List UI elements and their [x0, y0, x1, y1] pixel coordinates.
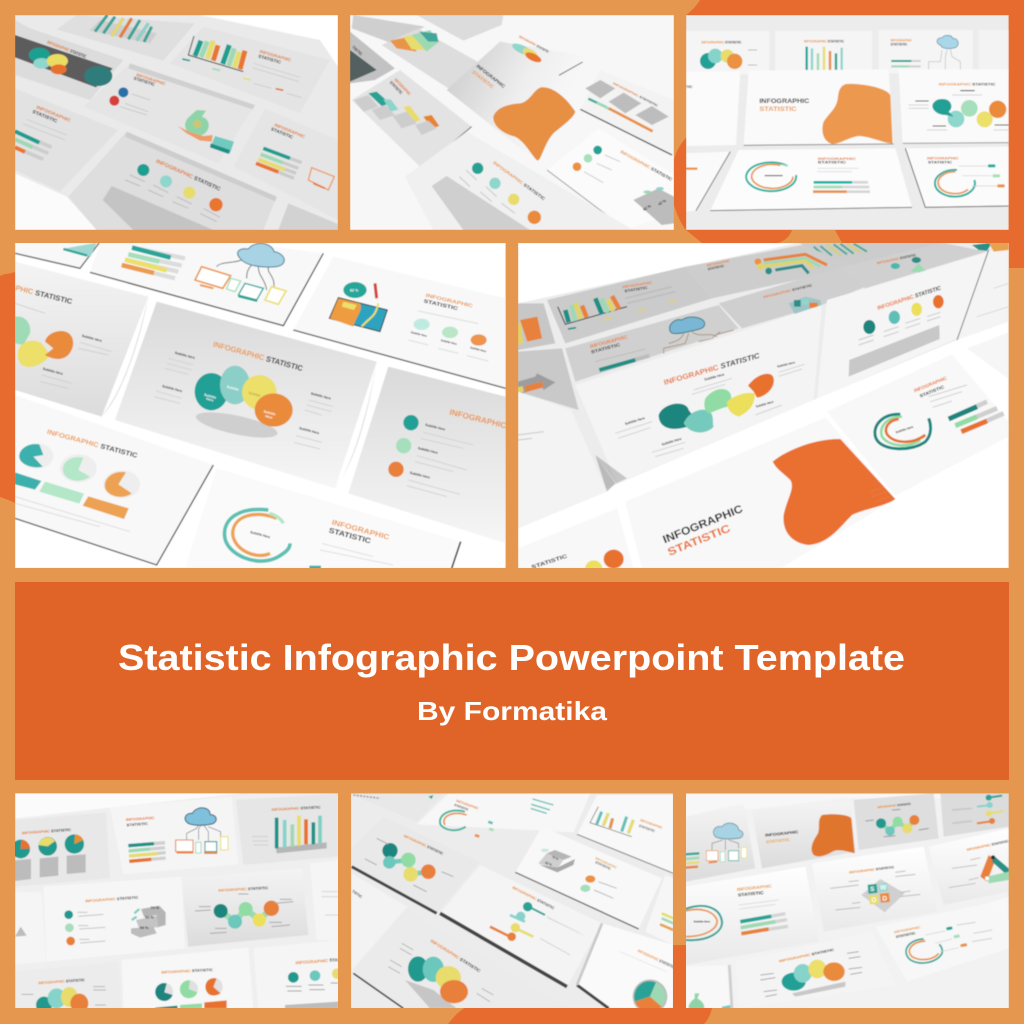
slide: far right wall	[957, 243, 1009, 340]
panel: photo 5 perspective slides with wave and title blob	[517, 243, 1009, 578]
slide: back row cloud: INFOGRAPHIC	[891, 39, 913, 43]
slide: wall with circles row	[817, 252, 989, 398]
slide: bubbles partial	[15, 962, 122, 1013]
slide: centre bubble cluster: Subtitle	[248, 391, 261, 398]
slide: back left arrow	[517, 348, 579, 410]
slide: bubbles partial: INFOGRAPHIC STATISTIC	[38, 978, 85, 985]
slide: three pies: INFOGRAPHIC STATISTIC	[22, 828, 72, 835]
slide: pies with labels	[122, 948, 253, 1008]
panel: photo 8 slides with SWOT and ring	[685, 793, 1010, 1009]
slide: stair labels: INFOGRAPHIC	[393, 77, 412, 96]
slide: four circles with text panel	[68, 132, 277, 230]
slide: wall with circles row: INFOGRAPHIC STATISTIC	[877, 285, 943, 312]
slide: SWOT: INFOGRAPHIC STATISTIC	[849, 865, 895, 875]
chart: ring	[875, 414, 931, 449]
slide: top left	[352, 15, 425, 43]
icon: stairs: 70 %	[551, 855, 559, 861]
slide: bottom right ring: STATISTIC	[928, 160, 953, 164]
slide: bubbles bottom	[735, 932, 895, 1009]
decorative blob: top right	[674, 0, 1024, 268]
slide: ring and bars: STATISTIC	[919, 384, 945, 399]
slide: ring and bars: INFOGRAPHIC	[913, 375, 948, 393]
slide: back angled arrows: STATISTIC	[707, 264, 725, 271]
slide: circles partial: INFOGRAPHIC	[295, 958, 328, 965]
slide: circles partial	[253, 940, 351, 1008]
slide: cloud with bars: INFOGRAPHIC	[126, 816, 155, 822]
slide: far right corner	[967, 332, 1009, 379]
slide: three circles with grey arrows: 42 %	[658, 198, 667, 206]
slide: SWOT: W	[880, 885, 887, 892]
slide: bubbles angled: INFOGRAPHIC STATISTIC	[429, 938, 482, 973]
decorative blob: bottom centre	[448, 945, 712, 1024]
slide: back row far right	[1008, 30, 1009, 72]
slide: money bag corner	[685, 965, 732, 1009]
banner: orange title block	[15, 582, 1009, 780]
slide: left wavy circles: Subtitle Here	[42, 367, 63, 376]
slide: bottom centre ring	[710, 148, 912, 211]
slide: back angled arrows	[685, 245, 859, 298]
slide: brush and tablet: Subtitle Here	[470, 345, 487, 353]
slide: bottom left circles: STATISTIC	[531, 554, 568, 571]
slide: stairs: INFOGRAPHIC	[595, 856, 618, 870]
slide: centre bubble cluster: Subtitle Here	[174, 351, 195, 360]
slide: big title with orange blob	[447, 35, 589, 162]
panel: photo 3 front view slides	[686, 15, 1009, 230]
slide: column chart	[236, 793, 338, 865]
slide: right devices	[254, 122, 336, 192]
slide: ring with bars: STATISTIC	[738, 890, 764, 898]
slide: front wave: Subtitle Here	[755, 400, 774, 409]
slide: right icon list	[348, 367, 508, 543]
slide: wavy circles	[899, 69, 1009, 143]
slide: title with orange blob: INFOGRAPHIC	[661, 503, 745, 546]
slide: back row cloud	[879, 30, 973, 73]
slide: back centre diagram: INFOGRAPHIC STATISTIC	[763, 283, 813, 299]
slide: orange blob title: STATISTIC	[766, 837, 790, 844]
slide: bottom left circles	[518, 508, 634, 578]
slide: title with orange blob	[625, 418, 895, 568]
slide: triangle arrows	[929, 828, 1010, 905]
slide: ring: INFOGRAPHIC	[456, 799, 479, 811]
slide: stair labels: STATISTIC	[389, 80, 404, 95]
slide: back angled arrows: INFOGRAPHIC	[706, 259, 731, 268]
panel: photo 6 flat slide wall	[11, 793, 351, 1013]
slide: wave angled	[352, 817, 480, 913]
slide: front wave: INFOGRAPHIC STATISTIC	[663, 351, 761, 387]
slide: corner	[987, 897, 1009, 923]
icon: paint tablet: 62 %	[350, 288, 359, 292]
slide: corner	[278, 203, 338, 230]
slide: left blank	[351, 873, 407, 970]
icon: cloud	[238, 243, 284, 267]
slide: back row circles: INFOGRAPHIC STATISTIC	[701, 41, 742, 45]
slide: bottom centre ring: STATISTIC	[818, 161, 847, 165]
slide: pie: INFOGRAPHIC STATISTIC	[637, 948, 675, 970]
slide: three pies	[11, 812, 110, 887]
slide: centre bubble cluster: Subtitle Here	[310, 391, 331, 401]
slide: top left remainder	[15, 243, 99, 268]
slide: money bag: INFOGRAPHIC	[136, 72, 166, 86]
slide: left wavy circles: PHIC STATISTIC	[15, 283, 74, 306]
slide: centre bubble cluster: Here	[206, 397, 214, 403]
slide: keys: INFOGRAPHIC STATISTIC	[512, 886, 555, 911]
icon: stairs: 54 %	[140, 926, 149, 930]
slide: centre bubble cluster: Subtitle Here	[162, 384, 183, 393]
shape: orange blob	[773, 439, 895, 545]
slide: right devices: INFOGRAPHIC	[274, 122, 306, 139]
slide: clustered bar chart	[181, 36, 302, 98]
slide: partial left	[15, 892, 46, 964]
chart: ring	[746, 162, 796, 191]
slide: bottom four circles	[420, 134, 630, 230]
slide: circles partial: STATISTIC	[329, 958, 351, 963]
slide: dark ribbon edge: TISTIC	[351, 44, 364, 57]
panel: photo 7 angled slides	[351, 793, 675, 1014]
slide: title with orange blob: STATISTIC	[759, 106, 797, 113]
slide: title with orange blob: STATISTIC	[666, 523, 732, 559]
icon: cloud	[185, 808, 216, 825]
slide: cloud and devices	[90, 243, 323, 326]
slide: left wall	[518, 392, 615, 528]
slide: top strip	[352, 793, 443, 822]
slide: ring right	[875, 903, 1009, 982]
chart: ring	[225, 509, 290, 561]
slide: stairs	[43, 877, 185, 962]
slide: big title with orange blob: INFOGRAPHIC STATISTIC	[518, 35, 550, 54]
slide: bottom ring	[185, 468, 461, 569]
icon: money bag in hand	[178, 110, 234, 154]
slide: stairs	[515, 827, 662, 929]
slide: ring right: INFOGRAPHIC	[894, 925, 921, 934]
slide: brush and tablet: Subtitle Here	[440, 338, 458, 346]
slide: bottom ring: Subtitle Here	[250, 530, 271, 539]
slide: wave highlighted	[182, 868, 308, 947]
slide: map ribbons	[382, 28, 483, 88]
slide: bar chart: INFOGRAPHIC	[622, 281, 653, 289]
slide: ring with bars: Subtitle Here	[694, 920, 711, 924]
subtitle: By Formatika	[417, 696, 608, 726]
slide: bottom right ring: INFOGRAPHIC	[927, 156, 959, 160]
slide: wave small: INFOGRAPHIC STATISTIC	[877, 802, 912, 809]
slide: centre bubble cluster: Subtitle	[204, 393, 217, 400]
slide: ring with bars	[685, 867, 819, 965]
slide: bottom ring: STATISTIC	[328, 526, 373, 546]
slide: SWOT: D	[882, 895, 887, 902]
slide: money bag	[108, 64, 255, 154]
slide: cloud diagram: INFOGRAPHIC	[589, 334, 629, 350]
slide: top middle	[417, 15, 503, 41]
slide: big title with orange blob: INFOGRAPHIC	[475, 64, 507, 89]
slide: ring and bars: Subtitle Here	[895, 425, 914, 434]
slide: centre bubble cluster	[115, 302, 377, 488]
slide: back row bars	[776, 32, 871, 70]
slide: front wave	[575, 305, 822, 483]
slide: keys	[440, 865, 602, 987]
slide: partial right	[310, 860, 338, 940]
slide: back left orange card	[518, 303, 555, 350]
slide: keys small	[940, 793, 1009, 837]
slide: wavy circles: INFOGRAPHIC STATISTIC	[939, 81, 995, 86]
slide: ring with bars: INFOGRAPHIC	[737, 883, 772, 892]
slide: bottom left pie charts: INFOGRAPHIC STATISTIC	[46, 429, 138, 460]
slide: SWOT: O	[871, 897, 877, 904]
slide: ring and bars	[827, 354, 1009, 496]
slide: pies with labels: INFOGRAPHIC STATISTIC	[161, 968, 213, 975]
slide: right icon list: Subtitle Here	[425, 423, 446, 432]
icon: stairs	[538, 849, 575, 872]
slide: centre bubble cluster: INFOGRAPHIC STATISTIC	[212, 340, 304, 373]
slide: three circles with grey arrows: 62 %	[642, 204, 652, 212]
slide: bubbles angled	[353, 908, 569, 1008]
slide: left progress bars: STATISTIC	[32, 109, 59, 124]
panel: photo 1 slides with bars and money bag	[15, 15, 338, 230]
slide: brush and tablet: INFOGRAPHIC	[425, 293, 474, 310]
slide: stairs: INFOGRAPHIC STATISTIC	[85, 896, 139, 903]
slide: four circles with text panel: INFOGRAPHIC STATISTIC	[155, 159, 221, 193]
slide: centre bubble cluster: Subtitle Here	[299, 426, 320, 435]
slide: back row circles	[686, 31, 769, 74]
slide: bottom left pie charts	[15, 395, 213, 565]
slide: grey cards with long bar: INFOGRAPHIC STATISTIC	[612, 81, 660, 108]
slide: stairs: STATISTIC	[595, 860, 612, 871]
slide: top bar chart	[57, 15, 195, 61]
slide: back right circles: INFOGRAPHIC STATISTIC	[876, 253, 917, 265]
slide: bars	[577, 795, 673, 873]
slide: front wave: Subtitle Here	[704, 372, 725, 382]
slide: wave angled: INFOGRAPHIC STATISTIC	[403, 834, 444, 856]
slide: triangle arrows: INFOGRAPHIC STATISTIC	[966, 839, 1010, 852]
slide: SWOT: S	[870, 886, 875, 893]
slide: ring: STATISTIC	[454, 803, 470, 812]
slide: back centre diagram	[719, 268, 865, 328]
slide: wave small	[854, 793, 939, 850]
panel: photo 2 slides with orange title blob	[350, 15, 674, 230]
slide: bottom four circles: INFOGRAPHIC STATISTIC	[492, 160, 546, 201]
slide: cloud with bars: STATISTIC	[126, 822, 148, 827]
slide: ring	[417, 793, 590, 838]
slide: grey cards with long bar	[580, 80, 673, 156]
slide: front wave: Subtitle Here	[624, 416, 645, 426]
slide: dark ribbon edge	[350, 32, 395, 83]
slide: ring right: STATISTIC	[895, 931, 917, 939]
slide: bottom centre ring: INFOGRAPHIC	[818, 157, 857, 161]
slide: money bag: STATISTIC	[133, 76, 155, 87]
shape: orange blob	[812, 814, 855, 856]
slide: back bars top	[799, 243, 966, 268]
slide: centre bubble cluster: Subtitle	[226, 385, 239, 392]
slide: right icon list: Subtitle Here	[417, 446, 438, 455]
slide: orange blob title: INFOGRAPHIC	[765, 829, 799, 838]
slide: left wavy circles	[15, 262, 148, 417]
slide: brush and tablet	[292, 281, 506, 390]
slide: mid left: TIC	[686, 84, 693, 89]
slide: big title with orange blob: STATISTIC	[471, 70, 495, 90]
icon: paint tablet	[329, 282, 387, 332]
decorative blob: left	[0, 272, 15, 503]
title: Statistic Infographic Powerpoint Template	[118, 637, 905, 678]
slide: bars: INFOGRAPHIC	[640, 818, 663, 830]
slide: back right circles	[837, 243, 986, 288]
slide: bottom ring: INFOGRAPHIC	[331, 518, 391, 542]
slide: wave highlighted: INFOGRAPHIC STATISTIC	[218, 886, 269, 893]
slide: bottom right ring	[905, 147, 1009, 207]
slide: mid left	[686, 72, 740, 146]
slide: bubbles bottom: INFOGRAPHIC STATISTIC	[779, 948, 835, 963]
shape: orange blob	[493, 87, 575, 161]
slide: brush and tablet: Subtitle Here	[410, 330, 428, 338]
slide: brush and tablet: STATISTIC	[423, 298, 459, 312]
slide: three circles with grey arrows	[546, 145, 674, 226]
panel: photo 4 slides with bubbles, cloud and rings	[15, 243, 508, 569]
icon: stairs	[131, 906, 166, 938]
slide: bars: STATISTIC	[638, 824, 656, 834]
slide: clustered bar chart: STATISTIC	[258, 53, 282, 65]
slide: cloud	[685, 803, 755, 882]
chart: wave of circles	[659, 374, 774, 432]
slide: left progress bars: INFOGRAPHIC	[36, 105, 72, 123]
slide: right devices: STATISTIC	[270, 126, 294, 140]
slide: front wave: Subtitle Here	[777, 360, 796, 369]
icon: stairs: 70 %	[151, 906, 160, 910]
slide: cloud diagram: STATISTIC	[590, 342, 621, 355]
slide: left wavy circles: Subtitle Here	[81, 334, 102, 343]
slide: dark panel with bubbles	[15, 20, 123, 100]
slide: title with orange blob	[744, 69, 894, 145]
slide: pie	[548, 918, 675, 1014]
slide: centre bubble cluster: Subtitle	[263, 409, 276, 416]
slide: right icon list: Subtitle Here	[409, 471, 430, 480]
slide: column chart: INFOGRAPHIC STATISTIC	[272, 805, 321, 812]
slide: cloud with bars	[110, 797, 238, 874]
slide: clustered bar chart: INFOGRAPHIC	[259, 49, 292, 63]
slide: centre bubble cluster: Here	[265, 414, 273, 420]
icon: stairs: 62 %	[145, 915, 154, 919]
slide: front wave: Subtitle Here	[661, 437, 682, 447]
slide: back row bars: INFOGRAPHIC STATISTIC	[804, 40, 845, 44]
slide: far right cards	[645, 875, 673, 945]
slide: bar chart: STATISTIC	[624, 286, 648, 293]
slide: right icon list: INFOGRAPHIC	[449, 408, 508, 430]
slide: left progress bars	[15, 104, 72, 162]
slide: SWOT	[812, 847, 937, 932]
icon: stairs: 62 %	[545, 861, 553, 867]
slide: orange blob title	[752, 802, 855, 868]
slide: three circles with grey arrows: INFOGRAPHIC STATISTIC	[620, 149, 673, 182]
slide: bottom left	[686, 152, 730, 212]
slide: stair labels	[352, 70, 472, 168]
shape: orange blob	[822, 84, 893, 144]
slide: title with orange blob: INFOGRAPHIC	[759, 98, 810, 105]
slide: left blank: TISTIC	[351, 889, 363, 899]
slide: bar chart	[547, 267, 712, 343]
slide: dark panel with bubbles: INFOGRAPHIC STATISTIC	[46, 40, 87, 59]
slide: back row cloud: STATISTIC	[891, 42, 908, 46]
slide: cloud diagram	[565, 305, 739, 382]
